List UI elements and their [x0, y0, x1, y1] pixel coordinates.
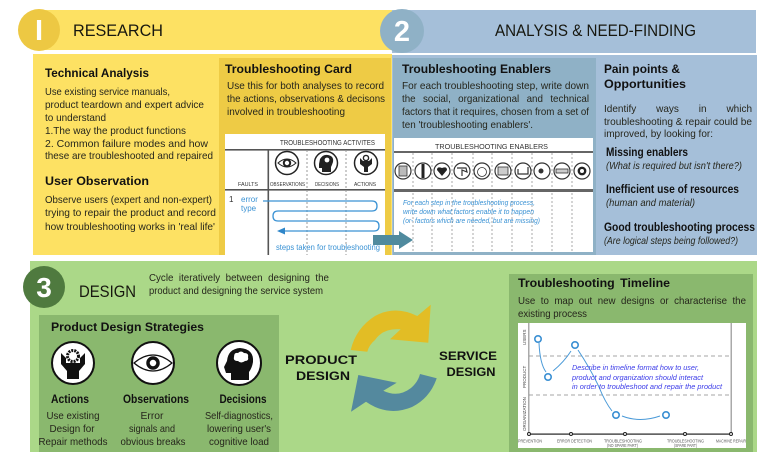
text block: pain points and opportunities: Opportunities — [604, 77, 686, 91]
arrow: service to product — [351, 374, 437, 412]
label: product design — [285, 353, 358, 383]
timeline axis: TROUBLESHOOTING — [604, 438, 642, 444]
panel body: research — [33, 54, 392, 255]
text block: design intro: product and designing the service system — [149, 285, 323, 297]
icon: wrench — [354, 152, 378, 174]
heading: troubleshooting enablers: Troubleshooting Enablers — [402, 62, 551, 76]
strategy: decisions: Decisions — [220, 392, 267, 406]
axis labels: actors: USERS — [522, 329, 527, 345]
chart: troubleshooting activities card: FAULTS — [238, 182, 258, 188]
icon: eye — [276, 152, 298, 174]
step number 2: 2 — [394, 16, 410, 48]
description: timeline: Use to map out new designs or characterise the — [518, 295, 746, 307]
chart: timeline — [518, 323, 746, 448]
annotation: timeline instruction: product and organization should interact — [571, 373, 704, 382]
label: service design: DESIGN — [446, 365, 496, 379]
text block: technical analysis — [45, 66, 213, 162]
panel: analysis and need-finding — [380, 9, 757, 255]
step number 1 — [18, 9, 60, 51]
description: enablers: ten 'troubleshooting enablers'. — [402, 119, 533, 131]
strategy: observations: Observations — [123, 392, 189, 406]
text block: technical analysis: Technical Analysis — [45, 66, 149, 80]
annotation: enablers instruction: For each step in the troubleshooting process, — [403, 198, 535, 207]
description: timeline: existing process — [518, 308, 587, 320]
timeline axis — [518, 432, 746, 448]
strategy: observations: signals and — [129, 423, 175, 435]
step number 3 — [23, 266, 65, 308]
text block: user observation: how troubleshooting works in 'real life' — [45, 221, 215, 233]
description: timeline — [518, 295, 746, 320]
heading: troubleshooting card: Troubleshooting Card — [225, 62, 352, 76]
annotation: enablers instruction: write down what factors enable it to happen — [403, 207, 534, 216]
heading: troubleshooting timeline: Troubleshooting Timeline — [518, 276, 670, 290]
description: enablers: the social, organizational and technical — [402, 93, 589, 105]
annotation: timeline instruction — [571, 363, 723, 391]
heading: research: RESEARCH — [73, 21, 163, 40]
strategy: observations: obvious breaks — [120, 436, 186, 448]
text block: user observation: trying to repair the product and record — [45, 207, 216, 219]
annotation: enablers instruction: (or- factors which are needed, but are missing) — [403, 216, 540, 225]
label: service design — [439, 349, 497, 379]
text block: pain points and opportunities: Identify ways in which — [604, 103, 752, 115]
text block: technical analysis: these are troubleshooted and repaired — [45, 150, 213, 162]
panel: research — [18, 9, 392, 255]
arrow: product to service — [351, 305, 431, 352]
text block: pain points and opportunities: troubleshooting & repair could be — [604, 116, 752, 128]
panel body: analysis — [392, 55, 757, 255]
timeline axis: (SPARE PART) — [674, 443, 697, 448]
panel: troubleshooting enablers — [393, 58, 596, 255]
chart: troubleshooting enablers card: TROUBLESHOOTING ENABLERS — [435, 142, 548, 151]
chart: troubleshooting activities card: 1 — [229, 195, 234, 204]
strategy: decisions: lowering user's — [207, 423, 271, 435]
chart: troubleshooting activities card: error — [241, 195, 258, 204]
timeline axis: (NO SPARE PART) — [607, 443, 639, 448]
chart: troubleshooting activities card: TROUBLESHOOTING ACTIVITES — [280, 140, 375, 147]
annotation: enablers instruction — [403, 198, 540, 225]
axis labels: actors — [522, 329, 527, 431]
strategy: actions — [38, 342, 108, 448]
strategy: actions: Use existing — [46, 410, 100, 422]
text block: pain points and opportunities: (Are logical steps being followed?) — [604, 235, 738, 247]
text block: pain points and opportunities: (human and material) — [606, 197, 695, 209]
annotation: timeline instruction: in order to troubleshoot and repair the product — [572, 382, 723, 391]
chart: troubleshooting activities card: ACTIONS — [354, 182, 376, 188]
text block: technical analysis: to understand — [45, 112, 106, 124]
timeline path — [535, 336, 669, 420]
timeline axis: PREVENTION — [518, 438, 542, 444]
label: service design: SERVICE — [439, 349, 497, 363]
text block: pain points and opportunities: improved, by looking for: — [604, 128, 713, 140]
strategy: decisions — [205, 341, 273, 448]
strategy: decisions: cognitive load — [209, 436, 269, 448]
description: enablers — [402, 80, 589, 131]
text block: pain points and opportunities: Inefficient use of resources — [606, 182, 739, 196]
text block: technical analysis: 2. Common failure modes and how — [45, 138, 208, 150]
panel: design — [23, 261, 757, 452]
description: troubleshooting card: involved in troubleshooting — [227, 106, 345, 118]
text block: technical analysis: product teardown and expert advice — [45, 99, 204, 111]
description: troubleshooting card: Use this for both analyses to record — [227, 80, 384, 92]
chart: troubleshooting activities card: OBSERVATIONS — [270, 182, 305, 188]
step number 2 — [380, 9, 424, 53]
strategy: actions: Design for — [50, 423, 95, 435]
text block: technical analysis: Use existing service manuals, — [45, 86, 170, 98]
description: troubleshooting card — [227, 80, 385, 118]
heading: design: DESIGN — [79, 282, 136, 301]
axis labels: actors: ORGANIZATION — [522, 397, 527, 431]
arrow: troubleshooting steps — [263, 201, 379, 234]
text block: pain points and opportunities: (What is required but isn't there?) — [606, 160, 742, 172]
arrow: card to enablers — [373, 231, 413, 249]
strategy: actions: Actions — [51, 392, 89, 406]
strategy: actions: Repair methods — [38, 436, 108, 448]
icons: ten enablers — [395, 163, 590, 179]
header band: research — [37, 10, 392, 50]
text block: design intro — [149, 272, 329, 297]
description: enablers: factors that it requires, chosen from a set of — [402, 106, 589, 118]
timeline axis: ERROR DETECTION — [557, 438, 592, 444]
description: enablers: For each troubleshooting step, write down — [402, 80, 589, 92]
strategy: observations: Error — [140, 410, 164, 422]
text block: design intro: Cycle iteratively between designing the — [149, 272, 329, 284]
text block: pain points and opportunities: Pain points & — [604, 62, 680, 76]
panel: product design strategies — [38, 315, 279, 452]
timeline axis: TROUBLESHOOTING — [667, 438, 704, 444]
chart: troubleshooting enablers card — [394, 138, 593, 252]
header band: analysis — [392, 10, 756, 53]
text block: pain points and opportunities — [604, 62, 755, 247]
text block: pain points and opportunities: Missing enablers — [606, 145, 688, 159]
step number 3: 3 — [36, 272, 52, 303]
text block: user observation: Observe users (expert and non-expert) — [45, 194, 212, 206]
axis labels: actors: PRODUCT — [522, 365, 527, 388]
strategy: observations — [120, 342, 189, 448]
chart: troubleshooting activities card — [225, 134, 385, 255]
description: troubleshooting card: the actions, observations & decisons — [227, 93, 385, 105]
text block: user observation: User Observation — [45, 174, 149, 188]
label: product design: PRODUCT — [285, 353, 358, 367]
panel: troubleshooting card — [219, 58, 391, 255]
strategy: decisions: Self-diagnostics, — [205, 410, 273, 422]
timeline axis: MACHINE REPAIR — [716, 438, 746, 444]
label: product design: DESIGN — [296, 369, 350, 383]
panel: troubleshooting timeline — [509, 274, 753, 452]
heading: analysis: ANALYSIS & NEED-FINDING — [495, 21, 696, 40]
chart: troubleshooting activities card: DECISIONS — [315, 182, 339, 188]
chart: troubleshooting activities card: steps taken for troubleshooting — [276, 243, 380, 252]
text block: technical analysis: 1.The way the product functions — [45, 125, 186, 137]
icon: head — [314, 152, 338, 174]
chart: troubleshooting activities card: type — [241, 204, 257, 213]
annotation: timeline instruction: Describe in timeline format how to user, — [572, 363, 699, 372]
step number 1: I — [35, 15, 43, 47]
heading: product design strategies: Product Design Strategies — [51, 320, 204, 334]
text block: user observation — [45, 174, 216, 233]
